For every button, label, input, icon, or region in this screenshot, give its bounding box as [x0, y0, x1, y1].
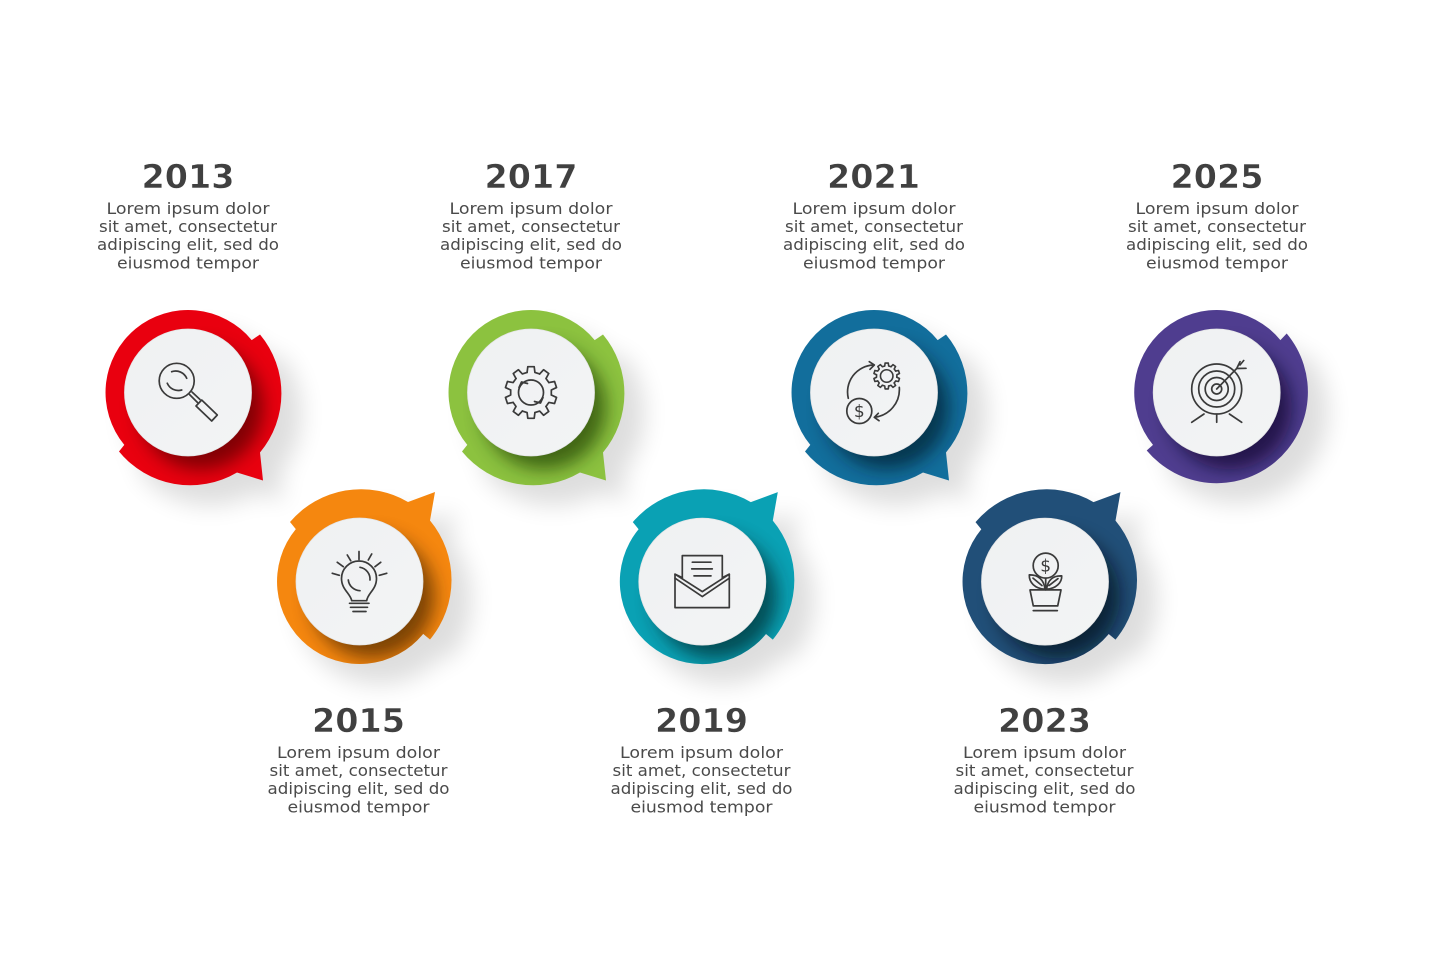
- year: 2017: 2017: [484, 157, 578, 196]
- year: 2013: 2013: [142, 157, 234, 196]
- icon: target with arrow: [1192, 360, 1246, 422]
- marker: blue circle: [792, 310, 987, 505]
- icon label: dollar sign: $: [854, 402, 865, 422]
- description: 2013: adipiscing elit, sed do: [97, 236, 279, 254]
- year: 2015: 2015: [312, 701, 405, 740]
- description: 2019: [610, 744, 792, 816]
- description: 2013: [97, 200, 279, 272]
- step: 2021: [783, 157, 987, 505]
- marker: teal circle: [620, 489, 814, 684]
- description: 2017: [440, 200, 622, 272]
- step: 2013: [97, 157, 301, 505]
- description: 2015: [268, 744, 450, 816]
- icon: envelope: [675, 556, 729, 608]
- description: 2017: adipiscing elit, sed do: [440, 236, 622, 254]
- description: 2013: sit amet, consectetur: [99, 218, 278, 236]
- step: 2019: [610, 489, 814, 816]
- description: 2015: eiusmod tempor: [288, 798, 430, 816]
- step: 2015: [268, 489, 472, 816]
- description: 2017: eiusmod tempor: [460, 254, 603, 272]
- description: 2021: eiusmod tempor: [803, 254, 946, 272]
- description: 2019: Lorem ipsum dolor: [620, 744, 784, 762]
- description: 2025: [1126, 200, 1308, 272]
- description: 2025: sit amet, consectetur: [1128, 218, 1307, 236]
- step: 2023: [954, 489, 1157, 816]
- description: 2019: adipiscing elit, sed do: [610, 780, 792, 798]
- description: 2015: sit amet, consectetur: [270, 762, 448, 780]
- description: 2021: Lorem ipsum dolor: [792, 200, 956, 218]
- description: 2013: Lorem ipsum dolor: [106, 200, 270, 218]
- description: 2019: sit amet, consectetur: [612, 762, 791, 780]
- icon: gear: [504, 367, 558, 418]
- description: 2025: eiusmod tempor: [1146, 254, 1289, 272]
- icon label: dollar sign: $: [1040, 557, 1051, 577]
- year: 2023: 2023: [998, 701, 1091, 740]
- description: 2023: adipiscing elit, sed do: [954, 780, 1136, 798]
- marker: navy circle: [963, 489, 1157, 684]
- description: 2023: sit amet, consectetur: [956, 762, 1134, 780]
- icon: gear and money cycle: [847, 362, 900, 424]
- marker: purple circle: [1134, 310, 1328, 503]
- description: 2025: Lorem ipsum dolor: [1136, 200, 1299, 218]
- marker: green circle: [449, 310, 644, 505]
- description: 2015: Lorem ipsum dolor: [277, 744, 441, 762]
- description: 2017: sit amet, consectetur: [442, 218, 621, 236]
- year: 2019: 2019: [655, 701, 748, 740]
- year: 2021: 2021: [827, 157, 920, 196]
- marker: red circle: [106, 310, 301, 505]
- description: 2023: eiusmod tempor: [974, 798, 1116, 816]
- step: 2025: [1126, 157, 1328, 503]
- description: 2019: eiusmod tempor: [630, 798, 773, 816]
- description: 2021: sit amet, consectetur: [785, 218, 964, 236]
- year: 2025: 2025: [1170, 157, 1264, 196]
- description: 2015: adipiscing elit, sed do: [268, 780, 450, 798]
- marker: orange circle: [277, 489, 472, 684]
- description: 2021: adipiscing elit, sed do: [783, 236, 965, 254]
- icon: light bulb: [332, 552, 387, 612]
- step: 2017: [440, 157, 644, 505]
- description: 2017: Lorem ipsum dolor: [450, 200, 613, 218]
- description: 2025: adipiscing elit, sed do: [1126, 236, 1308, 254]
- description: 2013: eiusmod tempor: [117, 254, 260, 272]
- icon: magnifier: [159, 363, 217, 421]
- description: 2021: [783, 200, 965, 272]
- description: 2023: [954, 744, 1136, 816]
- icon: money plant: [1029, 553, 1062, 611]
- description: 2023: Lorem ipsum dolor: [963, 744, 1127, 762]
